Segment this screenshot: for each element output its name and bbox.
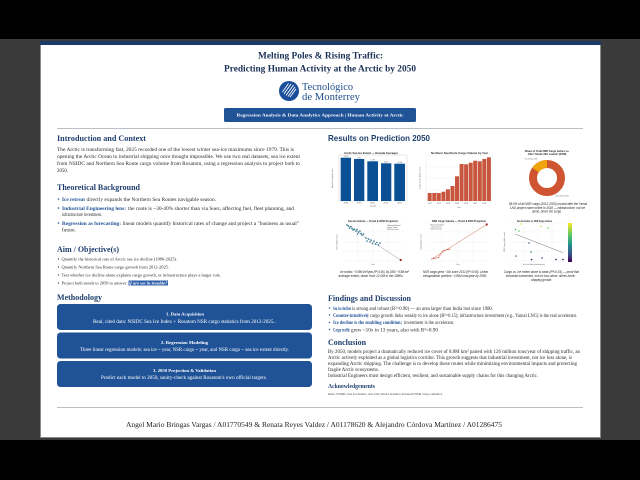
theoretical bullets: Industrial Engineering lens: — [62, 206, 126, 212]
bar chart: sea ice decade averages: 11.60 — [357, 157, 361, 159]
bar chart: sea ice decade averages: Decade — [370, 206, 376, 208]
bar chart: NSR cargo volume by year: Cargo Volume (million tons) — [418, 167, 422, 189]
bar chart: NSR cargo volume by year: 2022 — [473, 203, 477, 205]
bar chart: NSR cargo volume by year: Year — [457, 207, 461, 209]
scatter chart: sea ice trend and projection: Linear Trend — [387, 227, 397, 229]
theoretical bullets: linear models quantify historical rates of change and project a "business as usual" — [122, 220, 299, 227]
scatter caption: Cargo vs. ice extent alone is weak (R²=0.15) — proof that — [504, 270, 580, 274]
theoretical bullets: directly expands the Northern Sea Routes navigable season. — [86, 197, 216, 203]
method box 1 — [57, 304, 312, 330]
heading: acknowledgements: Acknowledgements — [328, 384, 376, 390]
scatter chart: sea ice trend and projection: Extent (million km²) — [336, 234, 338, 250]
bar chart: sea ice decade averages: Avg. Extent (million km²) — [331, 168, 334, 188]
bar chart: sea ice decade averages: 2000s — [370, 202, 375, 204]
findings bullets: Ice decline is the enabling condition; — [333, 320, 402, 326]
title: Melting Poles & Rising Traffic: — [258, 50, 383, 60]
line chart: NSR cargo trend and projection — [420, 219, 489, 266]
acknowledgements text: Data: NSIDC Sea Ice Index; oOo Our World in Data; Rosatom NSR cargo statistics. — [328, 392, 443, 396]
method box 3 — [57, 361, 312, 387]
intro text — [57, 146, 301, 174]
cargo caption: NSR cargo grew ~10x since 2012 (R²=0.90). Linear — [423, 270, 489, 274]
bar chart: NSR cargo volume by year: 2024 — [482, 203, 486, 205]
cargo caption — [423, 270, 489, 278]
scatter caption: shipping growth. — [531, 278, 552, 282]
theoretical bullets: infrastructure investment. — [62, 211, 102, 218]
donut chart: cargo share after Yamal LNG: Pre-Yamal LNG — [525, 158, 538, 160]
line chart: NSR cargo trend and projection: Cargo (million tons) — [420, 234, 422, 250]
heading: aim: Aim / Objective(s) — [57, 244, 119, 254]
findings bullets: Counter-intuitively — [333, 313, 369, 319]
line chart: NSR cargo trend and projection: Year — [456, 264, 460, 266]
scatter chart: sea ice trend and projection — [336, 219, 403, 266]
bar chart: sea ice decade averages: 1990s — [357, 202, 362, 204]
scatter chart: sea ice vs cargo with year colour bar: Sea Ice Extent vs. NSR Cargo Volume — [517, 219, 552, 223]
conclusion text: expanding Arctic shipping. The challenge is to develop these routes while minimizing environmental impacts and protecting — [328, 361, 577, 367]
logo: Tecnologico de Monterrey: Tecnológico — [302, 81, 353, 93]
bar chart: NSR cargo volume by year: Northern Sea Route Cargo Volume by Year — [431, 151, 488, 155]
line chart: NSR cargo trend and projection: NSR Cargo Volume — Trend & 2050 Projection — [432, 219, 486, 223]
scatter chart: sea ice vs cargo with year colour bar — [503, 219, 572, 266]
subtitle banner: Regression Analysis & Data Analytics Approach | Human Activity at Arctic — [236, 112, 404, 118]
method box 3: 3. 2050 Projection & Validation — [153, 368, 217, 373]
findings bullets — [329, 305, 577, 333]
heading: results: Results on Prediction 2050 — [328, 134, 430, 143]
findings bullets: cargo growth links weakly to ice alone (R²=0.15); infrastructure investment (e.g., Yamal LNG) is the real accelerant. — [370, 312, 577, 319]
heading: conclusion: Conclusion — [328, 337, 366, 347]
heading: introduction: Introduction and Context — [57, 133, 146, 143]
findings bullets: investment is the accelerant. — [404, 320, 454, 326]
bar chart: NSR cargo volume by year: 2018 — [455, 203, 459, 205]
intro text: opening the Arctic Ocean to industrial shipping once thought impossible. We use two real datasets, sea ice extent — [57, 154, 301, 160]
donut chart: cargo share after Yamal LNG: After Yamal LNG Launch (2018) — [528, 152, 566, 156]
donut caption: LNG project came online in 2018 — infrastructure, not ice — [510, 206, 585, 210]
bar chart: NSR cargo volume by year: 2012 — [428, 203, 432, 205]
findings bullets: grew ~10x in 13 years, also with R²=0.90 — [351, 327, 438, 333]
bar chart: NSR cargo volume by year: 2016 — [446, 203, 450, 205]
bar chart: sea ice decade averages — [331, 151, 407, 208]
aim bullets — [58, 256, 221, 286]
aim bullets: Quantify Northern Sea Route cargo growth from 2012-2025. — [62, 264, 169, 270]
donut caption: alone, drove the surge. — [532, 210, 562, 214]
bar chart: sea ice decade averages: 1980s — [344, 202, 349, 204]
donut caption — [509, 202, 587, 214]
bar chart: sea ice decade averages: 2010s — [384, 202, 389, 204]
conclusion text: Arctic actively exploited as a global logistics corridor. This growth suggests that industrial investment, not ice loss alone, is — [328, 355, 572, 361]
theoretical bullets — [58, 197, 299, 234]
conclusion text: By 2050, models project a dramatically reduced ice cover of 8.8M km² paired with 126 million tons/year of shipping traffic, an — [328, 348, 580, 355]
scatter caption: industrial investment, not ice loss alone, drives Arctic — [506, 274, 575, 278]
findings bullets: Cargo traffic — [333, 327, 350, 333]
subtitle banner — [224, 108, 416, 122]
heading: theoretical background: Theoretical Background — [57, 182, 140, 192]
line chart: NSR cargo trend and projection: Observed Volume — [430, 224, 444, 226]
donut chart: cargo share after Yamal LNG: Share of Total NSR Cargo before vs. — [525, 149, 570, 153]
method box 2: Three linear regression models: sea ice ~ year, NSR cargo ~ year, and NSR cargo ~ sea ice extent directly. — [80, 347, 289, 353]
bar chart: sea ice decade averages: 10.26 — [397, 162, 402, 164]
bar chart: sea ice decade averages: 2020s — [397, 202, 402, 204]
cargo caption: extrapolation predicts ~126M tons/year by 2050. — [423, 274, 487, 278]
scatter chart: sea ice vs cargo with year colour bar: Sea Ice Extent (million km²) — [523, 263, 545, 266]
title — [224, 50, 417, 74]
aim bullets: Project both trends to 2050 to answer: — [62, 280, 128, 286]
findings bullets: Sea ice decline — [333, 306, 351, 312]
intro text: The Arctic is transforming fast, 2025 recorded one of the lowest winter sea-ice maximums since 1979. This is — [57, 146, 294, 153]
bar chart: sea ice decade averages: 10.93 — [370, 160, 375, 162]
method box 2: 2. Regression Modeling — [161, 340, 209, 345]
method box 3: Predict each model to 2050, sanity-check against Rosatom's own official targets. — [101, 374, 267, 381]
heading: methodology: Methodology — [57, 292, 103, 302]
line chart: NSR cargo trend and projection: Linear Trend — [431, 226, 441, 228]
sea ice caption: Ice shrinks: ~0.05M km²/year (R²=0.90). By 2050: ~8.8M km² — [340, 270, 409, 274]
theoretical bullets: the route is ~30-40% shorter than via Suez, affecting fuel, fleet planning, and — [128, 205, 294, 212]
aim bullets: if are we in trouble? — [129, 280, 168, 286]
bar chart: sea ice decade averages: 12.02 — [344, 156, 348, 158]
conclusion text — [328, 348, 580, 379]
poster sheet — [40, 41, 601, 438]
donut caption: 88.6% of all NSR cargo (2012-2025) moved after the Yamal — [509, 202, 587, 206]
donut chart: cargo share after Yamal LNG — [525, 149, 570, 198]
method box 1: 1. Data Acquisition — [166, 312, 205, 316]
bar chart: sea ice decade averages: Arctic Sea Ice Extent — Decade Averages — [344, 151, 399, 155]
scatter chart: sea ice trend and projection: Sea Ice Extent — Trend & 2050 Projection — [348, 219, 398, 223]
bar chart: sea ice decade averages: 10.35 — [384, 162, 388, 164]
authors footer: Angel Mario Bringas Vargas / A01770549 & Renata Reyes Valdez / A01178620 & Alejandro Córdova Martínez / A01286475 — [126, 420, 502, 429]
bar chart: NSR cargo volume by year — [418, 151, 493, 209]
scatter chart: sea ice trend and projection: Year — [371, 264, 375, 266]
findings bullets: is strong and robust (R²=0.90) — an area larger than India lost since 1980. — [352, 305, 493, 312]
line chart: NSR cargo trend and projection: 2050 Forecast — [430, 227, 442, 230]
sea ice caption: average extent, down from 12.0M in the 1980s. — [338, 274, 404, 278]
scatter chart: sea ice vs cargo with year colour bar: NSR Cargo (million tons) — [503, 232, 506, 252]
method box 2 — [57, 332, 312, 358]
logo: Tecnologico de Monterrey: de Monterrey — [302, 91, 360, 103]
conclusion text: fragile Arctic ecosystems. — [328, 366, 380, 373]
bar chart: NSR cargo volume by year: 2020 — [464, 203, 468, 205]
scatter caption — [504, 270, 580, 282]
conclusion text: Industrial Engineers must design efficient, resilient, and sustainable supply chains for this changing Arctic. — [328, 372, 539, 379]
donut chart: cargo share after Yamal LNG: Post-Yamal LNG — [555, 194, 569, 198]
theoretical bullets: Ice retreat — [62, 197, 85, 203]
title: Predicting Human Activity at the Arctic by 2050 — [224, 64, 417, 74]
theoretical bullets: Regression as forecasting: — [62, 221, 121, 227]
logo: Tecnologico de Monterrey — [279, 81, 360, 103]
scatter chart: sea ice trend and projection: 2050 Forecast — [387, 228, 399, 231]
sea ice caption — [338, 270, 409, 278]
scatter chart: sea ice trend and projection: Observed Extent — [387, 224, 401, 227]
heading: findings: Findings and Discussion — [328, 293, 411, 303]
intro text: 2050. — [57, 168, 68, 174]
aim bullets: Test whether ice decline alone explains cargo growth, or infrastructure plays a larger role. — [62, 272, 221, 278]
intro text: from NSIDC and Northern Sea Route cargo volume from Rosatom, using a regression analysis to project both to — [57, 160, 300, 167]
theoretical bullets: future. — [62, 226, 76, 234]
aim bullets: Quantify the historical rate of Arctic sea ice decline (1980-2025). — [62, 256, 177, 262]
bar chart: NSR cargo volume by year: 2014 — [437, 203, 441, 205]
method box 1: Real, cited data: NSIDC Sea Ice Index + Rosatom NSR cargo statistics from 2012-2025.. — [93, 318, 276, 325]
